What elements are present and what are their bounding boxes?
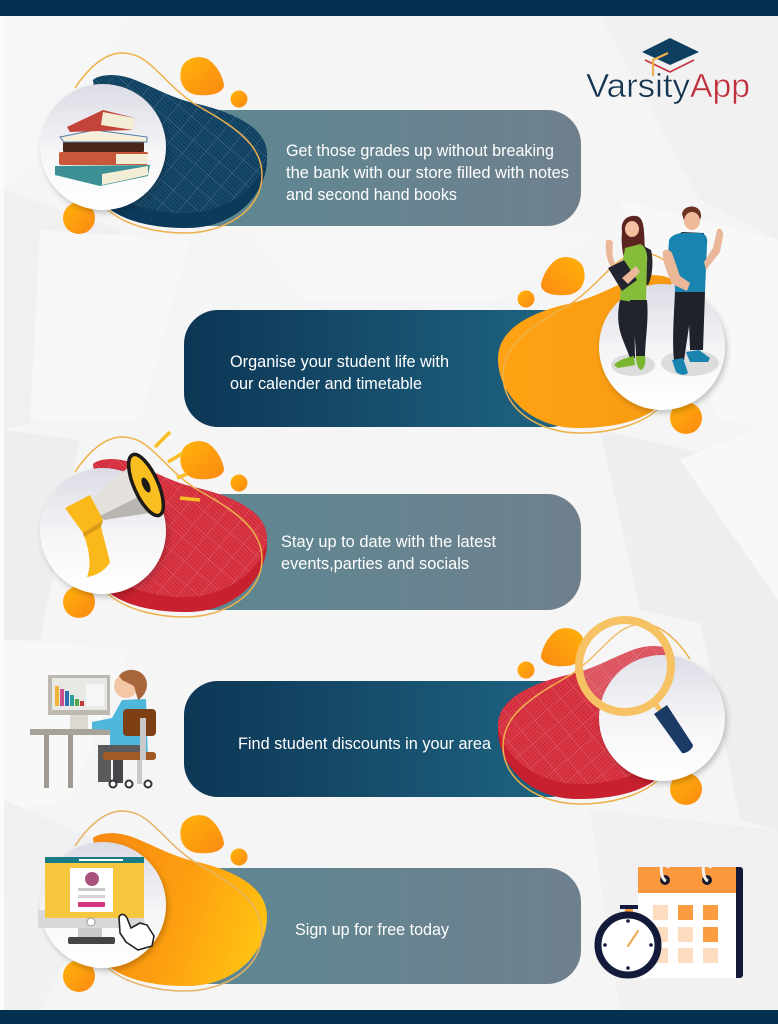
bottom dot 4 [670, 773, 702, 805]
text 2 [230, 352, 449, 393]
small dot 2 [518, 290, 534, 308]
row 1: books [40, 53, 581, 234]
row 5: sign up [38, 811, 581, 992]
icon: sign-up monitor [38, 857, 154, 950]
bottom border band [0, 1010, 778, 1024]
bar 2 [184, 310, 584, 427]
text 2: our calender and timetable [230, 374, 422, 393]
blob 1: navy [93, 75, 267, 228]
bar 5 [170, 868, 581, 984]
row 3: megaphone [40, 432, 581, 618]
bottom dot 2 [670, 402, 702, 434]
logo: VarsityApp: App [690, 67, 750, 104]
icon: megaphone [65, 432, 200, 577]
decorative gold outline 1 [75, 53, 262, 233]
text 1 [286, 141, 569, 204]
circle 5 [40, 842, 166, 968]
icon: magnifying glass [579, 620, 693, 753]
orange drop 4 [541, 628, 585, 666]
text 3: Stay up to date with the latest [281, 532, 496, 551]
top border band [0, 0, 778, 16]
text 3 [281, 532, 496, 573]
calendar [638, 858, 743, 978]
icon: calendar and stopwatch [598, 858, 743, 978]
bar 4 [184, 681, 584, 797]
text 1: Get those grades up without breaking [286, 141, 554, 160]
woman [606, 216, 652, 370]
bar 3 [170, 494, 581, 610]
illustration: man at desk [30, 670, 156, 788]
blob 2: orange [498, 275, 672, 428]
bar 1 [170, 110, 581, 226]
stopwatch [598, 905, 658, 975]
logo: VarsityApp [586, 38, 750, 104]
text 5: Sign up for free today [295, 920, 449, 939]
decorative gold outline 5 [75, 811, 262, 991]
circle 4 [599, 655, 725, 781]
small dot 5 [230, 848, 248, 866]
orange drop 3 [180, 441, 224, 479]
circle 1 [40, 84, 166, 210]
man [663, 206, 723, 375]
bottom dot 5 [63, 960, 95, 992]
text 4: Find student discounts in your area [238, 734, 492, 753]
icon: students [606, 206, 723, 376]
decorative gold outline 4 [503, 624, 690, 804]
circle 2 [599, 284, 725, 410]
text 1: the bank with our store filled with notes [286, 163, 569, 182]
orange drop 2 [541, 257, 585, 295]
small dot 4 [518, 662, 534, 678]
small dot 3 [230, 474, 248, 492]
row 2: students [184, 206, 725, 434]
circle 3 [40, 468, 166, 594]
logo: VarsityApp: Varsity [586, 67, 691, 104]
small dot 1 [230, 90, 248, 108]
row 4: discounts [30, 620, 725, 805]
bottom dot 1 [63, 202, 95, 234]
icon: book stack [55, 110, 150, 186]
blob 3: red [93, 459, 267, 612]
text 1: and second hand books [286, 185, 457, 204]
decorative gold outline 3 [75, 437, 262, 617]
decorative gold outline 2 [503, 253, 690, 433]
text 2: Organise your student life with [230, 352, 449, 371]
bottom dot 3 [63, 586, 95, 618]
orange drop 1 [180, 57, 224, 95]
blob 5: orange [93, 833, 267, 986]
orange drop 5 [180, 815, 224, 853]
blob 4: red [498, 646, 672, 799]
text 3: events,parties and socials [281, 554, 469, 573]
